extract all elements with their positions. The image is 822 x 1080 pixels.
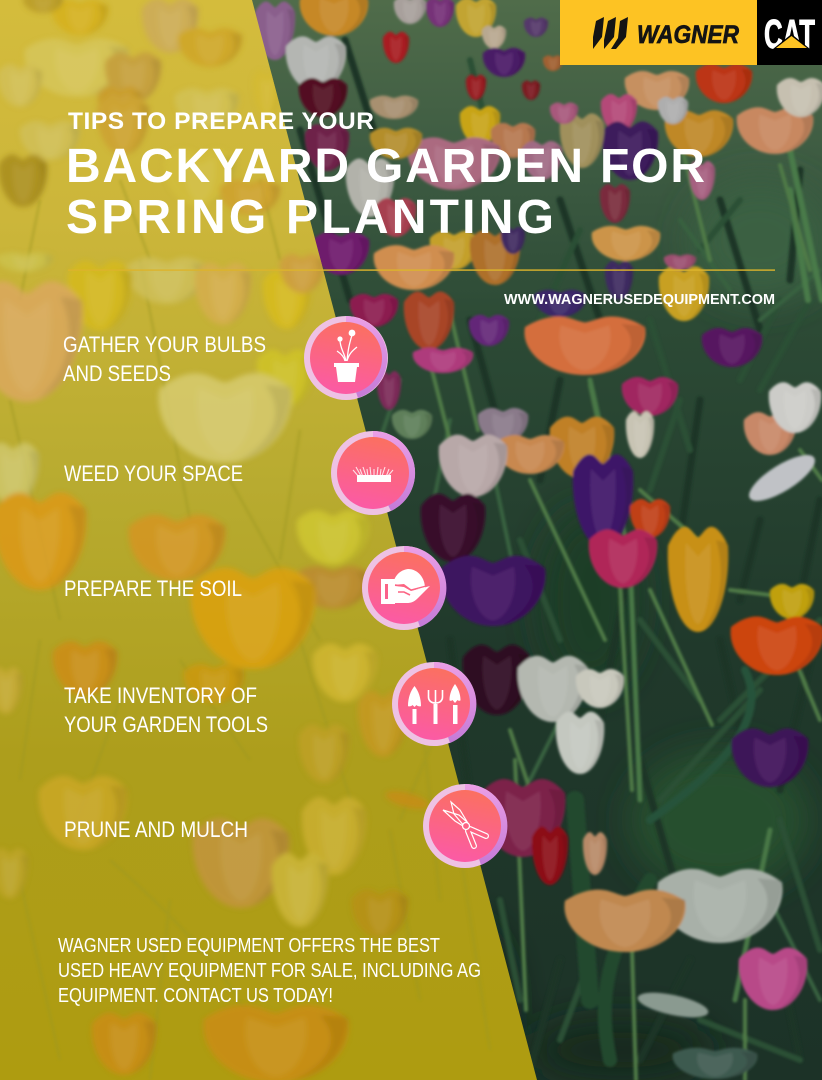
closing call to action text: EQUIPMENT. CONTACT US TODAY! xyxy=(58,985,333,1007)
closing call to action text: USED HEAVY EQUIPMENT FOR SALE, INCLUDING AG xyxy=(58,960,481,982)
website url: WWW.WAGNERUSEDEQUIPMENT.COM xyxy=(504,291,775,308)
icon: CAT triangle xyxy=(773,34,810,49)
step 5 label: PRUNE AND MULCH xyxy=(64,817,248,842)
step 3 label: PREPARE THE SOIL xyxy=(64,576,242,601)
title line: tips: TIPS TO PREPARE YOUR xyxy=(68,108,374,135)
step 2 icon: weeds xyxy=(331,431,415,515)
step 1 label: GATHER YOUR BULBS xyxy=(63,332,266,357)
title xyxy=(66,108,705,244)
closing call to action text: WAGNER USED EQUIPMENT OFFERS THE BEST xyxy=(58,935,440,957)
step 1 label: AND SEEDS xyxy=(63,361,171,386)
step 4 label: YOUR GARDEN TOOLS xyxy=(64,712,268,737)
icon: Wagner mark xyxy=(593,17,628,49)
step 1 icon: flower pot xyxy=(304,316,388,400)
step 4 icon: garden tools xyxy=(392,662,476,746)
text: WAGNER: WAGNER xyxy=(637,21,739,49)
step 5 icon: pruning shears xyxy=(423,784,507,868)
title line: spring planting: SPRING PLANTING xyxy=(66,191,554,244)
step 2 label: WEED YOUR SPACE xyxy=(64,461,243,486)
title line: backyard garden for: BACKYARD GARDEN FOR xyxy=(66,140,705,193)
step 4 label: TAKE INVENTORY OF xyxy=(64,683,257,708)
step 3 icon: hand with soil xyxy=(362,546,446,630)
logo: Wagner and CAT xyxy=(560,0,822,65)
panel: yellow diagonal overlay xyxy=(0,0,537,1080)
